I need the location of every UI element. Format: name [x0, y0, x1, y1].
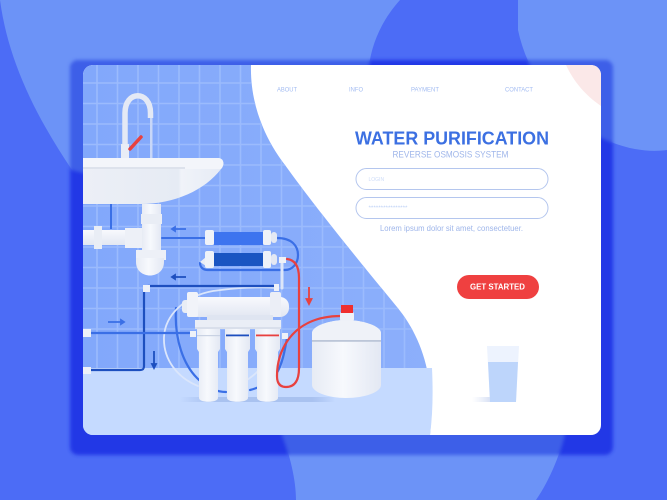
faucet	[121, 96, 152, 158]
reverse osmosis unit	[182, 292, 289, 402]
navigation: CONTACT	[505, 86, 533, 94]
tank red cap	[341, 305, 353, 313]
sink basin	[83, 158, 223, 204]
illustration panel	[83, 65, 440, 435]
login field	[356, 168, 548, 190]
floor	[83, 368, 433, 435]
card drop shadow	[68, 58, 616, 457]
get started button	[457, 275, 539, 299]
password field	[356, 198, 548, 218]
cartridge 3	[255, 329, 280, 402]
login field: LOGIN	[368, 177, 384, 183]
glass of water	[477, 346, 519, 402]
water lines	[90, 238, 298, 392]
pink corner accent	[566, 65, 601, 106]
faucet handle	[130, 137, 141, 149]
storage tank	[312, 305, 381, 398]
title: WATER PURIFICATION	[355, 128, 549, 148]
navigation	[277, 87, 533, 92]
card	[83, 65, 601, 435]
cartridge 2	[225, 329, 250, 402]
upper inline filter	[205, 230, 277, 245]
wall fittings	[83, 284, 279, 374]
description: Lorem ipsum dolor sit amet, consectetuer.	[380, 223, 523, 233]
lower inline filter	[200, 251, 286, 268]
navigation: PAYMENT	[411, 86, 439, 94]
red hot line	[277, 259, 341, 387]
subtitle: REVERSE OSMOSIS SYSTEM	[392, 150, 509, 160]
wall tiles	[83, 65, 440, 368]
floor shadow	[180, 397, 335, 402]
cartridge 1	[197, 329, 220, 402]
drain pipes	[83, 204, 166, 276]
flow arrows	[108, 227, 312, 368]
navigation: ABOUT	[277, 86, 297, 94]
get started button: GET STARTED	[470, 282, 525, 292]
navigation: INFO	[349, 86, 363, 94]
password field: ****************	[368, 206, 408, 212]
